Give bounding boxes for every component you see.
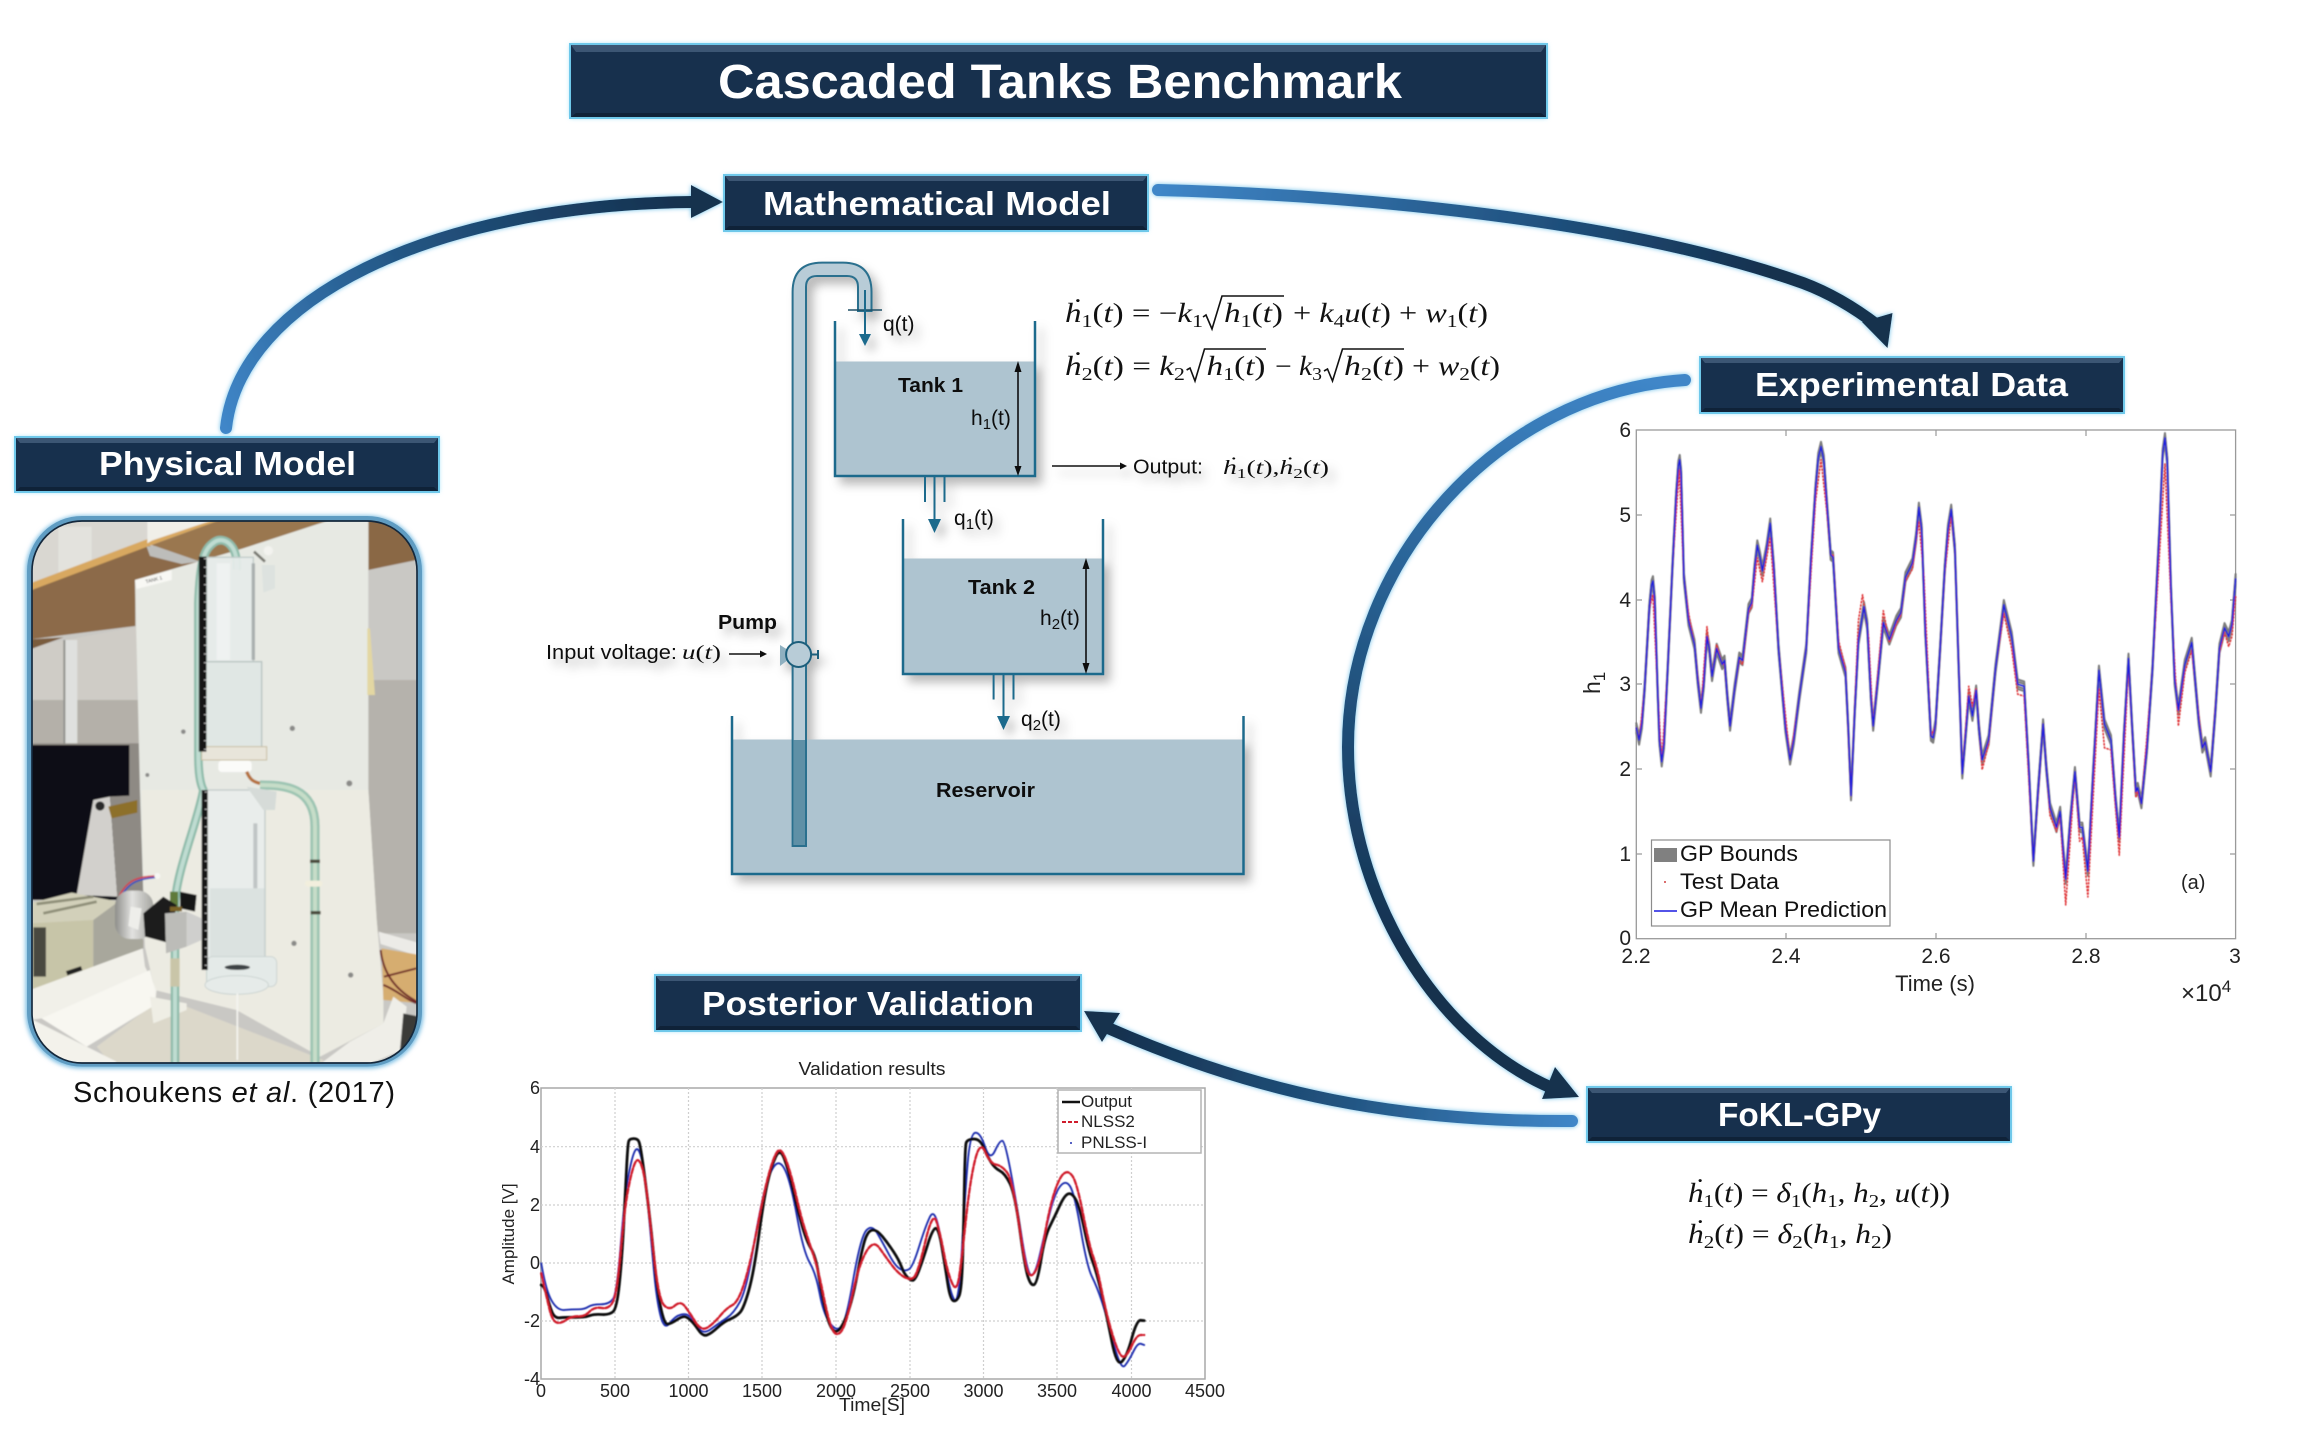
y axis numbers: 1	[1619, 843, 1631, 866]
equation 2: 2	[1174, 364, 1185, 384]
FoKL-GPy equations: 2	[1704, 1232, 1714, 1252]
banner: mathematical model: Mathematical Model	[763, 185, 1111, 222]
photo: upper tank cylinder	[202, 546, 275, 783]
y axis numbers: 2	[1619, 758, 1631, 781]
x axis numbers: 2000	[816, 1381, 856, 1401]
schematic labels: (t)	[1060, 607, 1080, 630]
equation 1: 1	[1081, 311, 1092, 331]
FoKL-GPy equations: u(t))	[1895, 1178, 1947, 1208]
equation 2: t) = k	[1104, 351, 1171, 381]
equation 2: + w	[1412, 351, 1456, 381]
banner: mathematical model	[724, 175, 1148, 231]
photo: black rulers	[203, 557, 206, 970]
legend: GP Mean Prediction	[1680, 897, 1887, 922]
x axis numbers: 3	[2229, 945, 2241, 968]
photo caption: Schoukens et al. (2017)	[73, 1077, 395, 1109]
title banner	[570, 44, 1547, 118]
x axis title: Time (s)	[1895, 971, 1975, 996]
banner: FoKL-GPy: FoKL-GPy	[1718, 1096, 1882, 1133]
legend: Test Data	[1680, 869, 1780, 894]
x axis numbers: 1000	[668, 1381, 709, 1401]
equation 2: h	[1344, 351, 1358, 381]
FoKL-GPy equations: 1	[1829, 1232, 1839, 1252]
schematic labels: 1	[983, 416, 991, 433]
equation 1: h	[1224, 298, 1238, 328]
equation 2: 2	[1459, 364, 1470, 384]
FoKL-GPy equations: ḣ	[1688, 1178, 1702, 1208]
equation 2: − k	[1275, 351, 1311, 381]
chart title: Validation results	[798, 1059, 946, 1079]
photo: lower tank cylinder	[205, 787, 277, 1060]
chart: experimental data h1 versus time	[1579, 419, 2241, 1007]
x axis numbers: 2.4	[1771, 945, 1801, 968]
photo: background walls	[30, 520, 422, 1067]
equation 1: t) = − k	[1103, 298, 1189, 328]
legend: NLSS2	[1081, 1112, 1135, 1131]
schematic labels: ḣ	[1223, 457, 1233, 479]
photo: cone stand	[77, 795, 143, 898]
y axis numbers: 0	[1619, 927, 1631, 950]
axis multiplier: ×10	[2181, 980, 2222, 1007]
data series	[541, 1133, 1144, 1366]
photo: right outlet tube	[260, 785, 321, 1067]
FoKL-GPy equations: (	[1714, 1219, 1725, 1249]
FoKL-GPy equations: 1	[1827, 1191, 1838, 1211]
equation 1: (	[1252, 298, 1263, 328]
y axis numbers: 5	[1619, 504, 1631, 527]
schematic labels: 2	[1052, 616, 1060, 633]
x axis numbers	[1621, 945, 2241, 968]
tank 2	[903, 519, 1103, 700]
output arrow	[1052, 462, 1127, 470]
photo: physical cascaded tanks rig	[25, 515, 424, 1069]
plot frame and ticks	[1636, 430, 2236, 939]
axis multiplier: 4	[2222, 977, 2231, 996]
x axis numbers: 4000	[1111, 1381, 1152, 1401]
schematic labels: 2	[1033, 717, 1041, 734]
photo: pump	[115, 873, 202, 953]
equation 2: t)	[1383, 351, 1402, 381]
schematic labels: q	[1021, 708, 1033, 731]
equation 1: t)	[1468, 298, 1486, 328]
equation 1: t)	[1263, 298, 1281, 328]
x axis numbers: 0	[536, 1381, 546, 1401]
banner: experimental data	[1700, 357, 2124, 413]
FoKL-GPy equations: h	[1812, 1178, 1825, 1208]
flow arrow q(t)	[848, 290, 882, 346]
plot frame and grid	[541, 1088, 1205, 1379]
schematic labels	[546, 313, 1329, 802]
schematic labels: Pump	[718, 612, 777, 634]
legend: Output	[1081, 1092, 1132, 1111]
legend	[1058, 1090, 1201, 1153]
x axis numbers: 2.2	[1621, 945, 1651, 968]
y axis title: h	[1579, 681, 1605, 694]
equation 2	[1065, 349, 1500, 384]
legend: GP Bounds	[1680, 841, 1798, 866]
schematic labels: Reservoir	[936, 780, 1035, 802]
equation 2: (	[1470, 351, 1480, 381]
equation 2: t)	[1245, 351, 1263, 381]
y axis title: 1	[1590, 672, 1609, 681]
arrow: mathematical model to experimental data	[1158, 190, 1892, 348]
legend	[1652, 840, 1890, 926]
schematic labels: q(t)	[883, 313, 914, 336]
NLSS2 red series	[541, 1147, 1144, 1357]
GP bounds band	[1636, 433, 2236, 884]
chart: validation results	[499, 1059, 1225, 1415]
arrow: physical model to mathematical model	[226, 185, 723, 428]
x axis numbers	[536, 1381, 1225, 1401]
y axis numbers: -4	[524, 1369, 540, 1389]
FoKL-GPy equations: 1	[1791, 1191, 1801, 1211]
FoKL-GPy equations: h	[1855, 1219, 1869, 1249]
input arrow	[729, 650, 767, 658]
schematic labels: (t)	[1041, 708, 1061, 731]
x axis numbers: 500	[600, 1381, 630, 1401]
x axis title: Time[S]	[839, 1395, 905, 1415]
equation 2: (	[1093, 351, 1104, 381]
FoKL-GPy equations: 1	[1704, 1191, 1714, 1211]
equation 1	[1065, 296, 1488, 331]
FoKL-GPy equations: )	[1881, 1219, 1892, 1249]
y axis numbers	[524, 1078, 540, 1389]
y axis numbers: 2	[530, 1195, 540, 1215]
photo: white tray and floor	[30, 948, 420, 1067]
FoKL-GPy equations: t) = δ	[1725, 1219, 1790, 1249]
FoKL-GPy equations: ḣ	[1688, 1219, 1702, 1249]
x axis numbers: 2500	[890, 1381, 930, 1401]
GP mean line	[1636, 438, 2236, 879]
equation 2: 1	[1223, 364, 1234, 384]
tank system schematic	[546, 263, 1329, 874]
schematic labels: (	[1303, 457, 1313, 479]
equation 1: 1	[1192, 311, 1203, 331]
schematic labels: Tank 1	[898, 375, 963, 397]
height arrow h1	[1014, 361, 1022, 476]
FoKL-GPy equations: 2	[1792, 1232, 1803, 1252]
banner: experimental data: Experimental Data	[1755, 366, 2069, 403]
photo: window sill, floor and cables	[379, 932, 420, 1003]
x axis numbers: 3000	[963, 1381, 1004, 1401]
pump symbol	[780, 642, 818, 667]
flow arrow q2(t)	[997, 674, 1010, 730]
flow arrow q1(t)	[928, 476, 941, 533]
equation 2: 2	[1082, 364, 1093, 384]
y axis numbers: 4	[1619, 589, 1631, 612]
y axis numbers: 0	[530, 1253, 540, 1273]
banner: FoKL-GPy	[1587, 1087, 2011, 1142]
equation 1: + k	[1293, 298, 1331, 328]
arrow: experimental data to FoKL-GPy	[1348, 380, 1685, 1099]
FoKL-GPy equations: ,	[1879, 1178, 1895, 1208]
photo: label tag: TANK 1	[145, 575, 163, 585]
x axis numbers: 3500	[1037, 1381, 1077, 1401]
FoKL-GPy equations: 2	[1871, 1232, 1881, 1252]
schematic labels: t)	[1312, 457, 1326, 479]
schematic labels: 1	[1237, 467, 1246, 482]
schematic labels: Input voltage:	[546, 642, 677, 664]
equation 1: (	[1092, 298, 1103, 328]
photo: black monitor	[30, 745, 129, 900]
FoKL-GPy equations: t) = δ	[1724, 1178, 1789, 1208]
pipe from reservoir to tank 1	[793, 263, 872, 846]
FoKL-GPy equations: (	[1801, 1178, 1812, 1208]
equation 2: 2	[1361, 364, 1372, 384]
equation 1: (t) + w	[1360, 298, 1443, 328]
banner: physical model	[15, 437, 439, 492]
x axis numbers: 2.6	[1921, 945, 1951, 968]
legend: PNLSS-I	[1081, 1133, 1147, 1152]
FoKL-GPy equations: h	[1813, 1219, 1827, 1249]
schematic labels: u(t)	[682, 642, 721, 664]
equation 2: h	[1206, 351, 1220, 381]
schematic labels: h	[971, 407, 983, 430]
equation 1: ḣ	[1065, 298, 1078, 328]
governing equations	[1065, 296, 1500, 384]
photo: wooden shelf	[30, 520, 420, 649]
schematic labels: h	[1040, 607, 1052, 630]
x axis numbers: 1500	[742, 1381, 782, 1401]
y axis numbers: 3	[1619, 673, 1631, 696]
schematic labels: (t)	[974, 507, 994, 530]
title text: Cascaded Tanks Benchmark	[718, 56, 1402, 109]
equation 1: 4	[1334, 311, 1344, 331]
equation 2: (	[1234, 351, 1245, 381]
reservoir	[732, 716, 1244, 874]
schematic labels: Output:	[1133, 456, 1203, 478]
Output black series	[541, 1139, 1144, 1362]
y axis numbers: 4	[530, 1137, 540, 1157]
photo: label tag	[135, 570, 172, 589]
panel letter: (a)	[2181, 872, 2205, 894]
y axis numbers: 6	[530, 1078, 540, 1098]
schematic labels: q	[954, 507, 966, 530]
photo: equipment box	[30, 893, 143, 990]
FoKL-GPy equations: (	[1714, 1178, 1724, 1208]
schematic labels: Tank 2	[968, 577, 1035, 599]
FoKL-GPy equations: (	[1803, 1219, 1813, 1249]
test data dots	[1636, 460, 2236, 905]
equation 2: ḣ	[1065, 351, 1078, 381]
FoKL-GPy equations: 2	[1869, 1191, 1879, 1211]
schematic labels: (t)	[991, 407, 1011, 430]
equation 2: t)	[1480, 351, 1498, 381]
data series	[1636, 433, 2236, 905]
schematic labels: 1	[966, 516, 974, 533]
schematic labels: 2	[1293, 467, 1303, 482]
photo: green supply tube	[174, 540, 237, 1067]
banner: posterior validation	[655, 975, 1081, 1031]
equation 1: (	[1458, 298, 1468, 328]
y axis numbers: -2	[524, 1311, 540, 1331]
tank 1	[835, 321, 1035, 502]
PNLSS-I blue series	[541, 1133, 1144, 1366]
photo: white backing panel	[134, 522, 370, 892]
x axis numbers: 2.8	[2071, 945, 2101, 968]
banner: physical model: Physical Model	[99, 445, 356, 482]
FoKL-GPy equations: h	[1853, 1178, 1867, 1208]
y axis numbers: 6	[1619, 419, 1631, 442]
arrow: FoKL-GPy to posterior validation	[1084, 1011, 1572, 1121]
y axis title: Amplitude [V]	[499, 1183, 518, 1285]
equation 2: (	[1372, 351, 1383, 381]
equation 1: 1	[1241, 311, 1252, 331]
schematic labels: t),ḣ	[1256, 457, 1289, 479]
x axis numbers: 4500	[1185, 1381, 1225, 1401]
FoKL-GPy equations: ,	[1838, 1178, 1853, 1208]
banner: posterior validation: Posterior Validation	[702, 985, 1034, 1022]
FoKL-GPy equations	[1688, 1178, 1950, 1252]
equation 1: 1	[1447, 311, 1458, 331]
FoKL-GPy equations: ,	[1839, 1219, 1855, 1249]
height arrow h2	[1082, 558, 1090, 674]
y axis numbers	[1619, 419, 1631, 950]
equation 1: u	[1344, 298, 1360, 328]
schematic labels: (	[1246, 457, 1256, 479]
equation 2: 3	[1312, 364, 1322, 384]
